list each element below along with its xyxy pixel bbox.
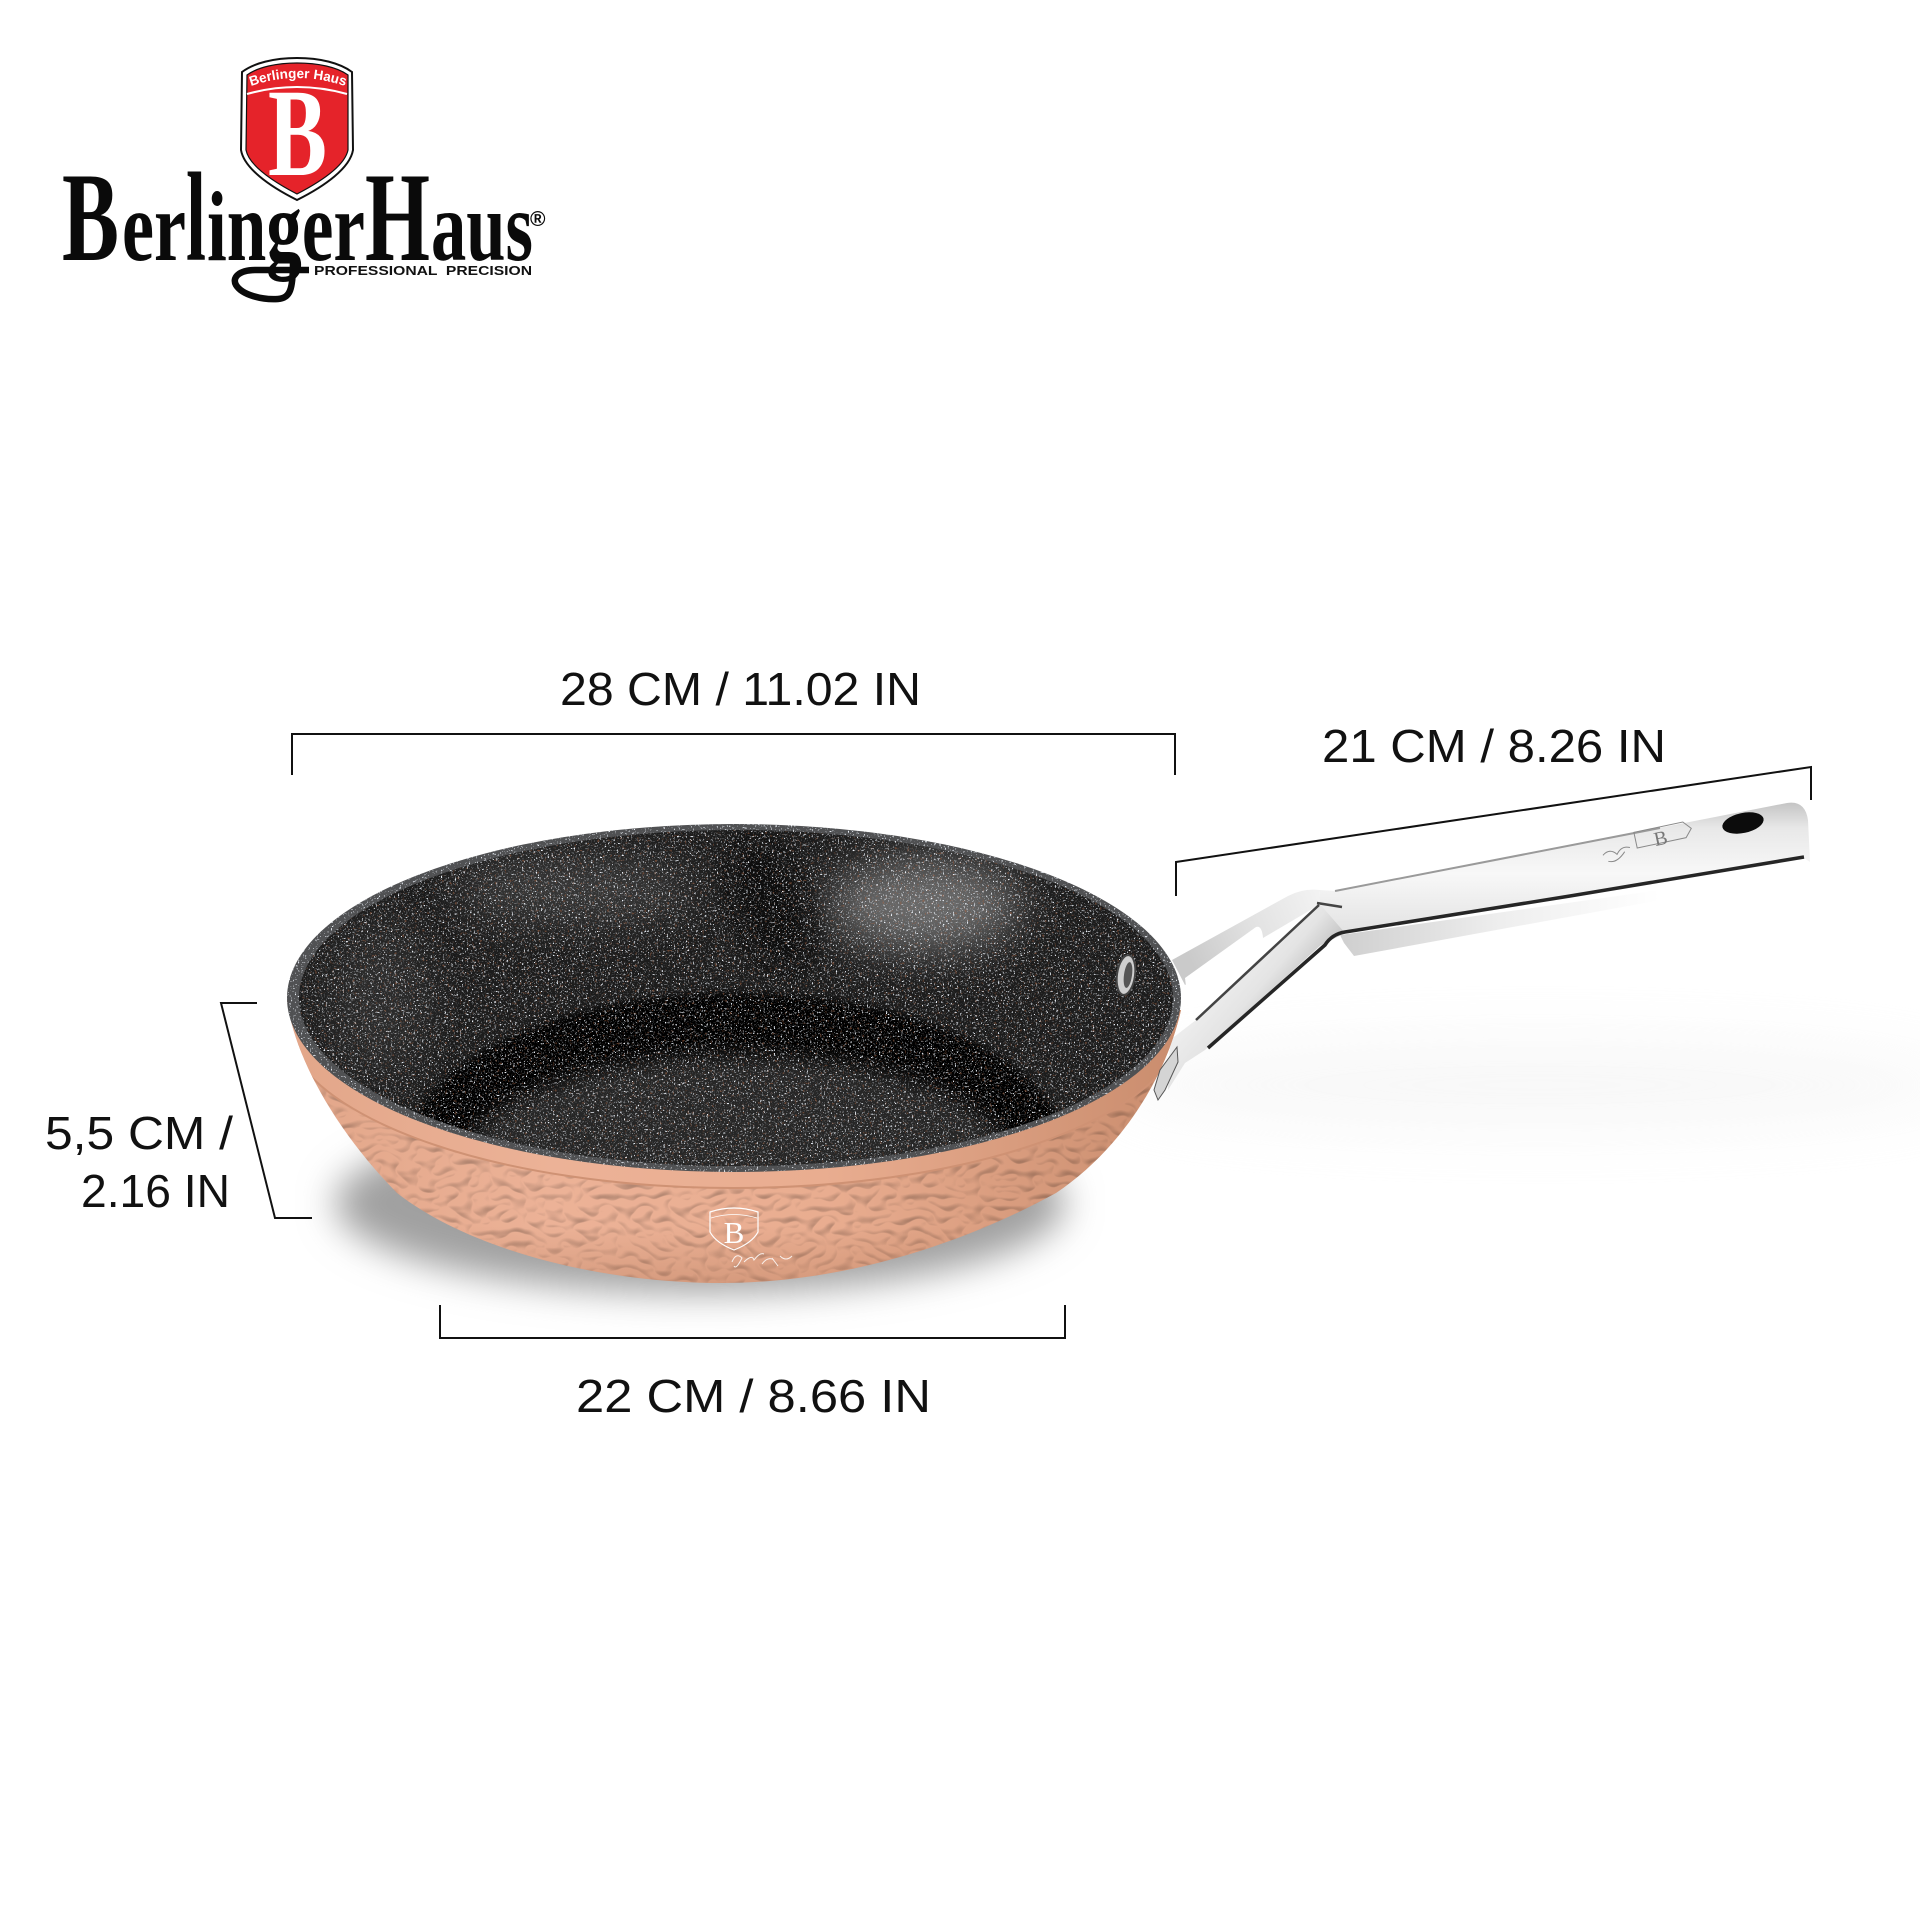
pan shadow (335, 1039, 1920, 1293)
icon: red shield emblem (240, 57, 354, 203)
registered mark: ® (530, 208, 546, 231)
logo: Berlinger Haus (62, 57, 546, 302)
handle top edge shading (1335, 828, 1660, 891)
tagline: PROFESSIONAL PRECISION (314, 264, 532, 278)
interior reflections (330, 827, 1020, 1080)
dimension: pan height 5.5 cm (45, 1003, 312, 1218)
dimension: pan height 5.5 cm: 5,5 CM / (45, 1107, 233, 1159)
dimension: pan diameter 28 cm: 28 CM / 11.02 IN (560, 663, 921, 715)
wordmark: BerlingerHaus: B (62, 148, 119, 288)
dimension: handle length 21 cm (1176, 720, 1811, 896)
dimension: base diameter 22 cm: 22 CM / 8.66 IN (576, 1370, 931, 1422)
dimension: handle length 21 cm: 21 CM / 8.26 IN (1322, 720, 1666, 772)
icon: red shield emblem: Berlinger Haus (249, 70, 346, 86)
copper hammered body (290, 1010, 1181, 1283)
handle upper arm (1172, 890, 1320, 985)
handle mount (1154, 1047, 1178, 1100)
dimension: pan diameter 28 cm (292, 663, 1175, 775)
handle arm reflection (1196, 903, 1342, 1020)
handle engraved logo: B (1652, 827, 1670, 851)
dimension: base diameter 22 cm (440, 1305, 1065, 1422)
rivet (1114, 954, 1138, 996)
handle hanging hole (1720, 809, 1766, 837)
wordmark g swash (235, 262, 309, 299)
signature (732, 1254, 792, 1267)
pan engraved logo: B (724, 1215, 744, 1250)
pan engraved logo (710, 1208, 792, 1267)
pan interior granite (299, 830, 1173, 1166)
steel handle (1168, 803, 1810, 1090)
dark pan floor ring (416, 991, 1058, 1166)
pan floor (468, 1048, 1006, 1166)
pan rim (285, 820, 1185, 1176)
wordmark: BerlingerHaus: inger (207, 171, 365, 282)
wordmark: BerlingerHaus: aus (431, 171, 533, 282)
wordmark: BerlingerHaus (62, 148, 533, 288)
speckles (295, 826, 1180, 1170)
handle lower arm (1168, 903, 1345, 1090)
icon: red shield emblem: B (268, 65, 327, 203)
handle tube (1319, 803, 1810, 945)
handle engraved logo (1600, 821, 1695, 863)
wordmark: BerlingerHaus: er (122, 171, 186, 282)
handle lower flange (1340, 862, 1808, 956)
smooth copper band under the rim (291, 1010, 1181, 1189)
handle dark reflection (1208, 857, 1804, 1048)
wordmark: BerlingerHaus: H (365, 148, 430, 288)
frying pan (280, 820, 1190, 1317)
wordmark: BerlingerHaus: l (186, 148, 206, 288)
dimension: pan height 5.5 cm: 2.16 IN (81, 1165, 230, 1217)
handle slot (1185, 927, 1263, 1012)
